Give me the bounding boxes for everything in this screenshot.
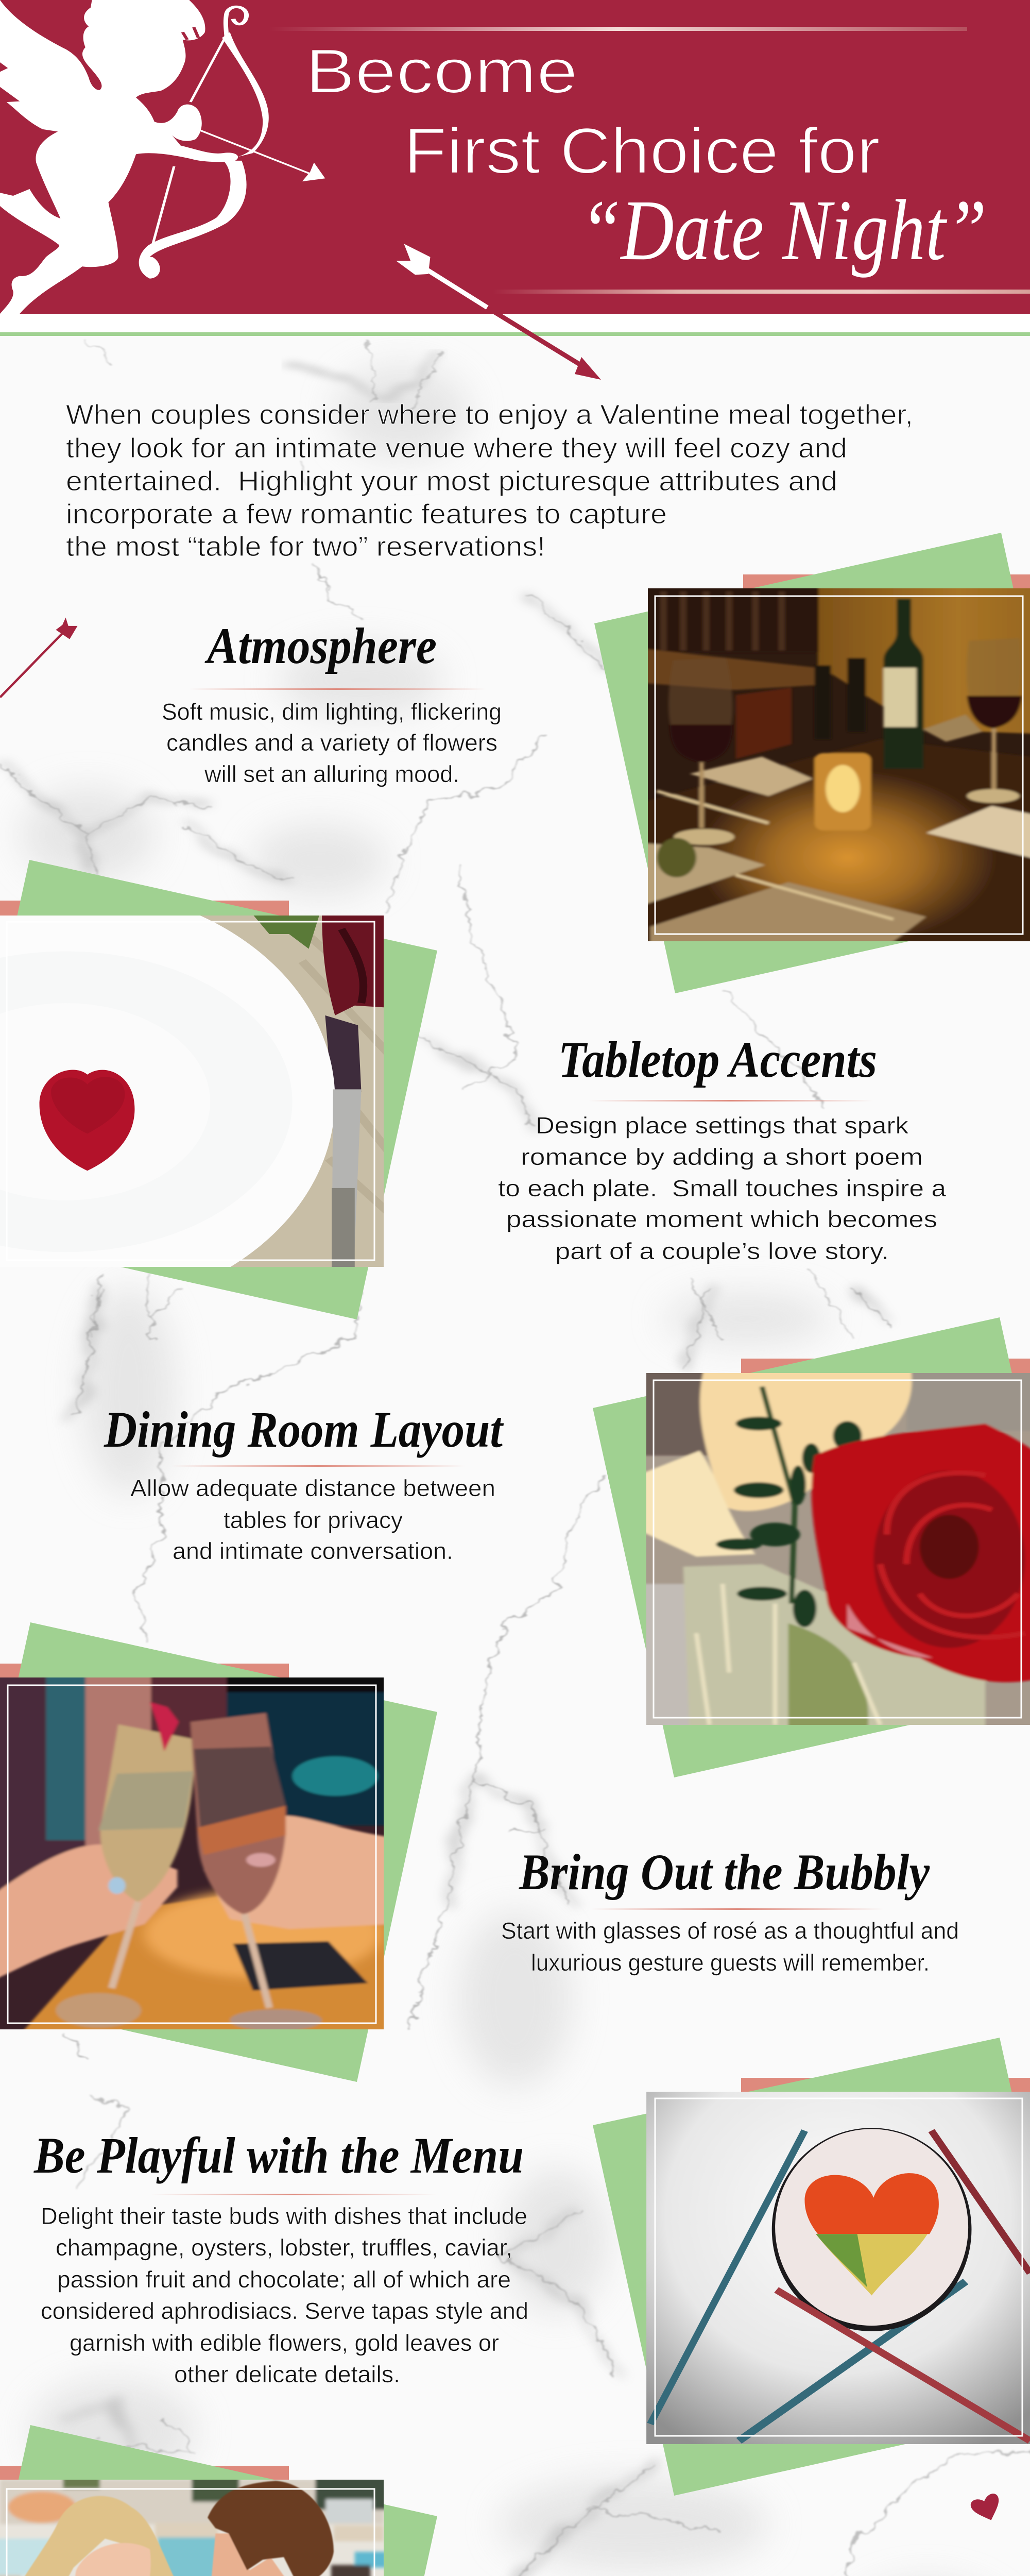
intro text xyxy=(66,399,913,562)
body: be playful with the menu: other delicate details. xyxy=(174,2361,400,2387)
body: be playful with the menu: Delight their taste buds with dishes that include xyxy=(41,2203,527,2229)
body: bring out the bubbly xyxy=(501,1918,959,1976)
panel: atmosphere photo xyxy=(594,533,1030,993)
body: atmosphere: Soft music, dim lighting, flickering xyxy=(162,699,502,725)
body: dining room layout: tables for privacy xyxy=(224,1507,403,1533)
body: be playful with the menu: passion fruit and chocolate; all of which are xyxy=(57,2266,511,2293)
body: be playful with the menu xyxy=(41,2203,528,2387)
intro text: incorporate a few romantic features to capture xyxy=(66,499,667,530)
body: atmosphere xyxy=(162,699,502,787)
title: First Choice for xyxy=(404,114,880,187)
panel: menu text xyxy=(33,2127,528,2387)
body: dining room layout: and intimate conversation. xyxy=(173,1538,453,1564)
arrow: crossing header xyxy=(396,244,601,380)
body: atmosphere: candles and a variety of flowers xyxy=(166,730,497,756)
intro text: When couples consider where to enjoy a Valentine meal together, xyxy=(66,399,913,430)
body: tabletop accents: romance by adding a short poem xyxy=(521,1144,923,1170)
panel: dining room photo xyxy=(593,1317,1030,1777)
body: atmosphere: will set an alluring mood. xyxy=(204,761,459,787)
body: tabletop accents: passionate moment which becomes xyxy=(506,1206,937,1232)
body: be playful with the menu: considered aphrodisiacs. Serve tapas style and xyxy=(41,2298,528,2324)
body: dining room layout: Allow adequate distance between xyxy=(130,1475,495,1501)
body: bring out the bubbly: Start with glasses of rosé as a thoughtful and xyxy=(501,1918,959,1944)
body: be playful with the menu: champagne, oysters, lobster, truffles, caviar, xyxy=(56,2234,512,2261)
intro text: the most “table for two” reservations! xyxy=(66,531,545,562)
body: tabletop accents xyxy=(498,1112,947,1264)
icon: cupid with bow xyxy=(0,0,325,314)
intro text: entertained. Highlight your most picturesque attributes and xyxy=(66,466,837,497)
panel: menu photo xyxy=(593,2038,1030,2496)
body: dining room layout xyxy=(130,1475,495,1564)
heading: atmosphere: Atmosphere xyxy=(204,617,437,674)
title: Become xyxy=(305,36,578,106)
body: tabletop accents: to each plate. Small touches inspire a xyxy=(498,1175,947,1201)
panel: bubbly photo xyxy=(0,1622,437,2082)
panel: tabletop photo xyxy=(0,860,437,1319)
panel: dining room text xyxy=(104,1401,504,1564)
body: tabletop accents: part of a couple’s love story. xyxy=(555,1238,889,1264)
heading: tabletop accents: Tabletop Accents xyxy=(558,1031,877,1088)
title xyxy=(305,36,987,278)
header band xyxy=(0,0,1030,336)
icons: hearts xyxy=(866,2492,1024,2576)
body: bring out the bubbly: luxurious gesture guests will remember. xyxy=(531,1950,930,1976)
heading: dining room layout: Dining Room Layout xyxy=(104,1401,504,1458)
body: be playful with the menu: garnish with edible flowers, gold leaves or xyxy=(70,2330,499,2356)
heading: bring out the bubbly: Bring Out the Bubbly xyxy=(519,1843,930,1901)
body: tabletop accents: Design place settings that spark xyxy=(536,1112,909,1139)
panel: tabletop text xyxy=(498,1031,947,1264)
panel: setting photo xyxy=(0,2425,437,2576)
heading: be playful with the menu: Be Playful with the Menu xyxy=(33,2127,524,2184)
arrow: left edge xyxy=(0,618,78,698)
panel: bubbly text xyxy=(501,1843,959,1976)
intro text: they look for an intimate venue where they will feel cozy and xyxy=(66,433,847,464)
panel: atmosphere text xyxy=(162,617,502,787)
